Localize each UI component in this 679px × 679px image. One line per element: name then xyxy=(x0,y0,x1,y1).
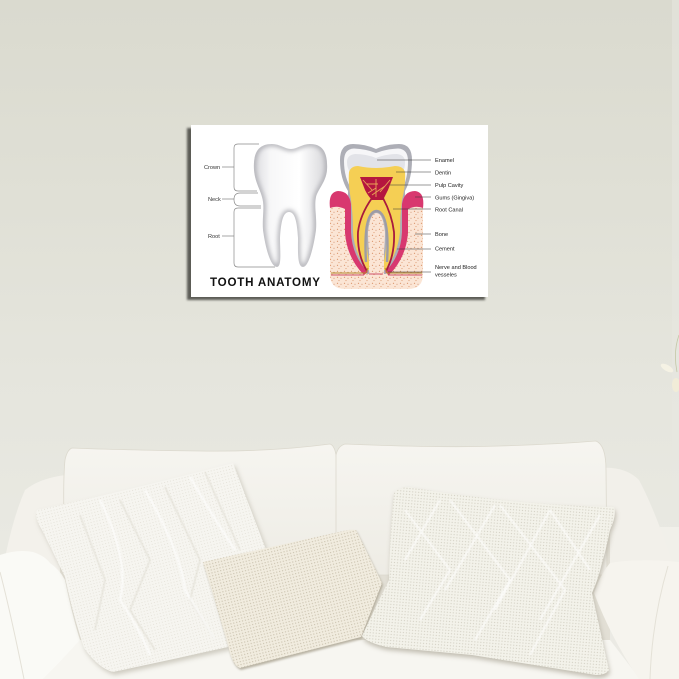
label: bone: Bone xyxy=(435,232,448,238)
plant at right edge xyxy=(659,335,679,392)
leader lines xyxy=(377,160,431,272)
label: enamel: Enamel xyxy=(435,158,454,164)
label: nerve and blood vessels: vesseles xyxy=(435,272,457,278)
seat xyxy=(43,640,640,679)
pillow right xyxy=(362,487,616,678)
label: neck: Neck xyxy=(208,197,221,203)
label: root: Root xyxy=(208,234,220,240)
left brackets xyxy=(222,144,275,267)
title: TOOTH ANATOMY xyxy=(210,276,320,289)
right front arm xyxy=(594,560,679,679)
label: dentin: Dentin xyxy=(435,170,451,176)
right back cushion xyxy=(336,441,607,575)
dentin xyxy=(349,166,405,270)
label: cement: Cement xyxy=(435,246,455,252)
left front arm xyxy=(0,551,80,679)
right back arm xyxy=(600,468,672,620)
pulp cavity xyxy=(360,177,393,200)
left back arm xyxy=(6,475,90,620)
canvas shadow xyxy=(187,128,485,300)
bone xyxy=(330,200,423,289)
label: nerve and blood vessels: Nerve and Blood xyxy=(435,265,477,271)
central bone between roots xyxy=(369,218,384,274)
sofa base behind pillows xyxy=(60,530,610,679)
wall piece at right xyxy=(660,527,679,567)
label: gums: Gums (Gingiva) xyxy=(435,196,474,202)
enamel outer shell xyxy=(340,144,412,274)
root canals xyxy=(358,198,372,271)
label: nerve and blood vessels xyxy=(435,265,477,278)
left back cushion xyxy=(64,444,337,575)
pink gums and ligament xyxy=(330,191,423,275)
label: crown: Crown xyxy=(204,165,220,171)
white tooth illustration xyxy=(254,144,328,267)
sofa xyxy=(0,441,679,679)
label: pulp cavity: Pulp Cavity xyxy=(435,183,463,189)
pillow left xyxy=(36,463,272,675)
cross-section tooth diagram xyxy=(330,144,423,289)
nerve and vessel lines xyxy=(331,268,422,273)
poster panel xyxy=(191,125,488,297)
gray cement ring around central bone xyxy=(365,211,388,262)
enamel inner xyxy=(344,148,408,190)
lumbar pillow xyxy=(203,530,383,670)
label: root canal: Root Canal xyxy=(435,208,463,214)
